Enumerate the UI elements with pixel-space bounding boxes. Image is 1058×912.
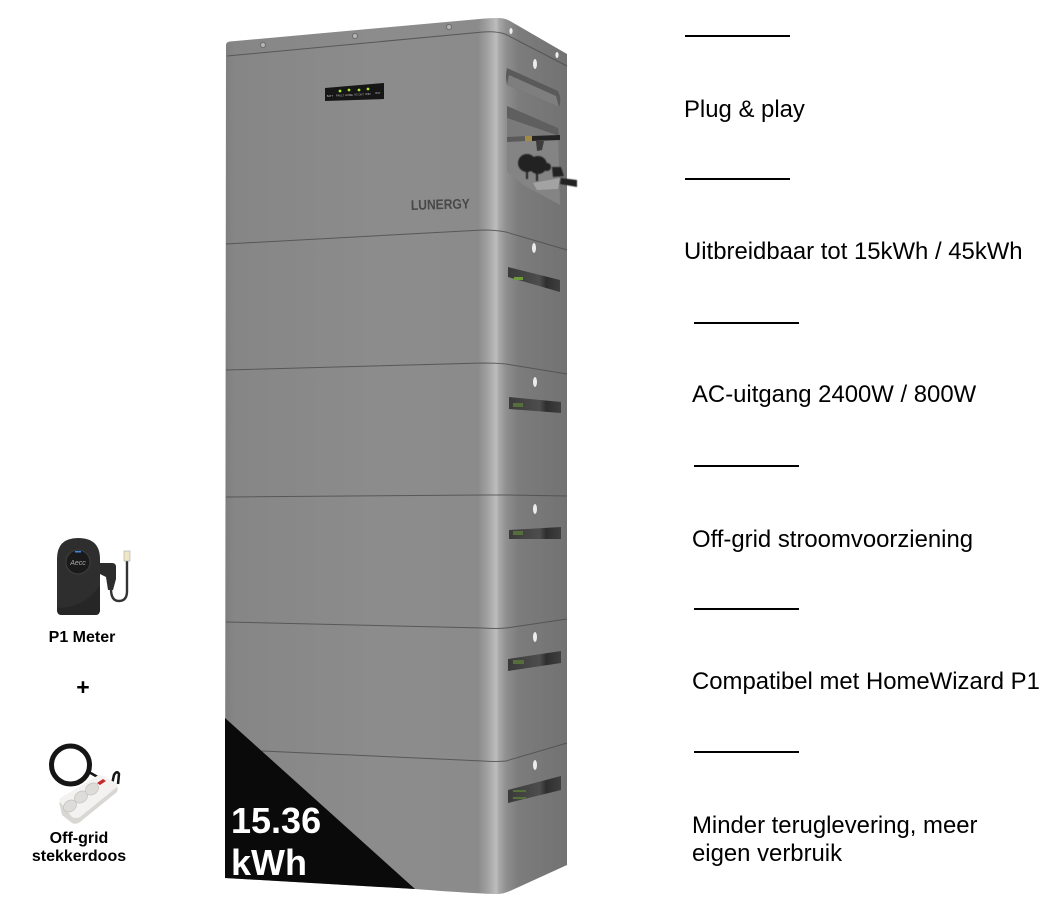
- feature: expandable: Uitbreidbaar tot 15kWh / 45kWh: [684, 238, 1023, 265]
- side handle slot top: [506, 59, 560, 107]
- feature: Plug & play: Plug & play: [684, 96, 805, 123]
- label: off-grid power strip: stekkerdoos: [32, 848, 126, 865]
- module seam 2: [226, 363, 567, 374]
- status LED panel: AC OUT: [354, 92, 364, 96]
- side handle module 6: [508, 760, 561, 803]
- module seam 5: [262, 743, 567, 762]
- side handle module 5: [508, 632, 561, 671]
- feature: HomeWizard compatible: Compatibel met HomeWizard P1: [692, 668, 1040, 695]
- plus sign: +: [76, 674, 90, 700]
- icon: P1 meter: [57, 538, 130, 615]
- side handle module 4: [509, 504, 561, 539]
- status LED panel: WIFI: [365, 92, 371, 96]
- product: battery tower: [225, 18, 577, 894]
- top screws: [260, 24, 559, 58]
- feature: AC output: AC-uitgang 2400W / 800W: [692, 381, 977, 408]
- tower front face: [225, 18, 498, 894]
- side connector bay: [507, 106, 577, 205]
- capacity value: 15.36: [231, 800, 321, 841]
- side handle module 2: [508, 243, 560, 292]
- feature: self consumption: eigen verbruik: [692, 840, 842, 867]
- tower side face: [498, 18, 567, 894]
- status LED panel: BATT: [327, 94, 334, 98]
- icon: P1 meter: Aecc: [69, 560, 86, 567]
- status LED panel: HOME: [345, 93, 353, 97]
- feature: self consumption: [692, 751, 978, 867]
- feature: off-grid supply: Off-grid stroomvoorziening: [692, 526, 973, 553]
- module seam 4: [226, 619, 567, 628]
- icon: power strip: [52, 746, 119, 824]
- feature: self consumption: Minder teruglevering, meer: [692, 812, 978, 839]
- label: P1 Meter: P1 Meter: [49, 629, 115, 646]
- module seam 3: [226, 495, 567, 497]
- capacity unit: kWh: [231, 842, 307, 883]
- capacity badge: [225, 718, 415, 889]
- status LED panel: RST: [375, 91, 381, 95]
- top cap seam: [227, 32, 567, 66]
- feature: Plug & play: [684, 35, 805, 123]
- side handle module 3: [509, 377, 561, 413]
- module seam 1: [226, 230, 567, 250]
- label: off-grid power strip: Off-grid: [50, 830, 108, 847]
- status LED panel: [325, 83, 384, 101]
- status LED panel: FAULT: [336, 94, 344, 98]
- brand logo: LUNERGY: [411, 195, 471, 213]
